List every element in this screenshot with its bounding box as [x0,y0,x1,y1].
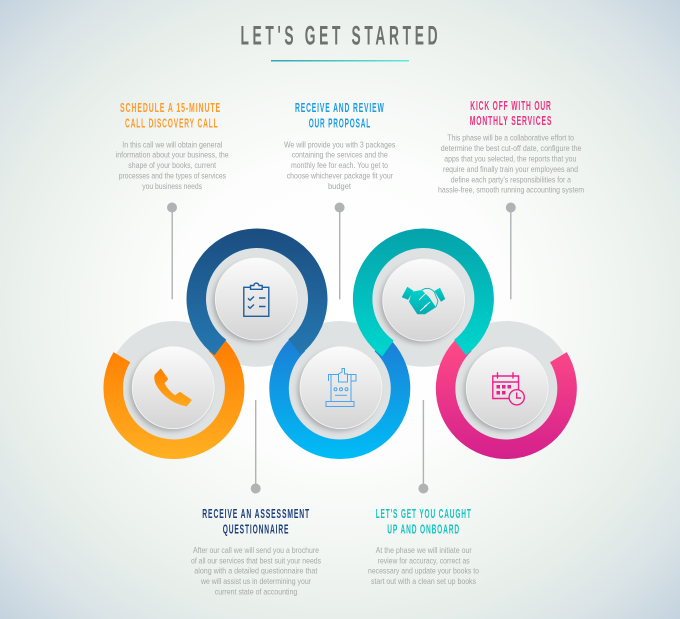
heading: assessment: QUESTIONNAIRE [223,522,289,537]
text block: kick off: This phase will be a collaborative effort to [447,133,574,143]
text block: assessment: After our call we will send you a brochure [193,545,319,555]
button: review document [298,347,382,431]
text: LET'S GET YOU CAUGHT [376,506,472,521]
connector: top right [506,202,516,299]
text block: onboard: start out with a clean set up books [371,576,476,586]
heading: kick off: MONTHLY SERVICES [470,113,552,128]
text block: receive proposal: containing the services and the [292,150,388,160]
heading: assessment [202,506,310,537]
text block: assessment: we will assist us in determining your [200,576,311,586]
text block: receive proposal [284,139,395,191]
grey discs behind rings [106,231,574,456]
text block: kick off: apps that you selected, the reports that you [444,154,576,164]
text block: onboard: At the phase we will initiate our [376,545,472,555]
text block: kick off: define each party's responsibilities for a [451,174,571,184]
text block: receive proposal: We will provide you with 3 packages [284,139,395,149]
text block: assessment: of all our services that best suit your needs [191,555,321,565]
ring: teal [363,238,484,348]
text block: schedule a call: shape of your books, current [128,160,216,170]
text block: assessment [191,545,321,596]
icon: phone [155,369,191,406]
icon: clipboard [244,283,269,316]
button: handshake [380,259,465,343]
button: calendar [464,347,548,431]
text block: receive proposal: choose whichever package fit your [287,170,393,180]
button: phone [130,347,214,431]
heading: kick off: KICK OFF WITH OUR [470,98,552,113]
icon: review document [326,368,356,406]
text block: receive proposal: budget [328,181,352,191]
text block: schedule a call: In this call we will obtain general [122,139,222,149]
heading: schedule a call: SCHEDULE A 15-MINUTE [120,100,221,115]
text block: kick off: determine the best cut-off date, configure the [441,143,582,153]
heading: receive proposal [295,100,385,130]
text block: kick off [438,133,584,195]
ring: pink [446,344,567,449]
heading: schedule a call [120,100,221,130]
icon: calendar [493,373,524,405]
text block: schedule a call [116,139,229,191]
ring: orange [113,344,235,449]
connector: bottom right [418,400,428,494]
ring: navy [196,238,318,348]
connector: top centre [335,202,345,299]
connector: bottom left [251,400,261,494]
title underline [271,60,409,62]
heading: onboard [376,506,472,537]
title: LET'S GET STARTED [240,22,438,51]
heading: assessment: RECEIVE AN ASSESSMENT [202,506,310,521]
text block: receive proposal: monthly fee for each. You get to [291,160,388,170]
ring: blue [279,344,401,449]
text block: schedule a call: information about your business, the [116,150,229,160]
connector: top left [167,202,177,299]
heading: kick off [470,98,552,128]
heading: schedule a call: CALL DISCOVERY CALL [125,115,218,130]
button: clipboard [213,258,297,342]
heading: receive proposal: RECEIVE AND REVIEW [295,100,385,115]
text block: onboard: necessary and update your books to [368,566,479,576]
text block: schedule a call: you business needs [142,181,202,191]
heading: onboard: UP AND ONBOARD [387,522,460,537]
text block: kick off: hassle-free, smooth running accounting system [438,185,584,195]
text block: onboard: review for accuracy, correct as [378,555,470,565]
heading: receive proposal: OUR PROPOSAL [309,115,371,130]
text block: assessment: current state of accounting [215,586,297,596]
text block: onboard [368,545,479,586]
icon: handshake [402,287,445,314]
text block: schedule a call: processes and the types of services [119,170,226,180]
text block: assessment: along with a detailed questionnaire that [194,566,318,576]
text block: kick off: require and finally train your employees and [443,164,578,174]
